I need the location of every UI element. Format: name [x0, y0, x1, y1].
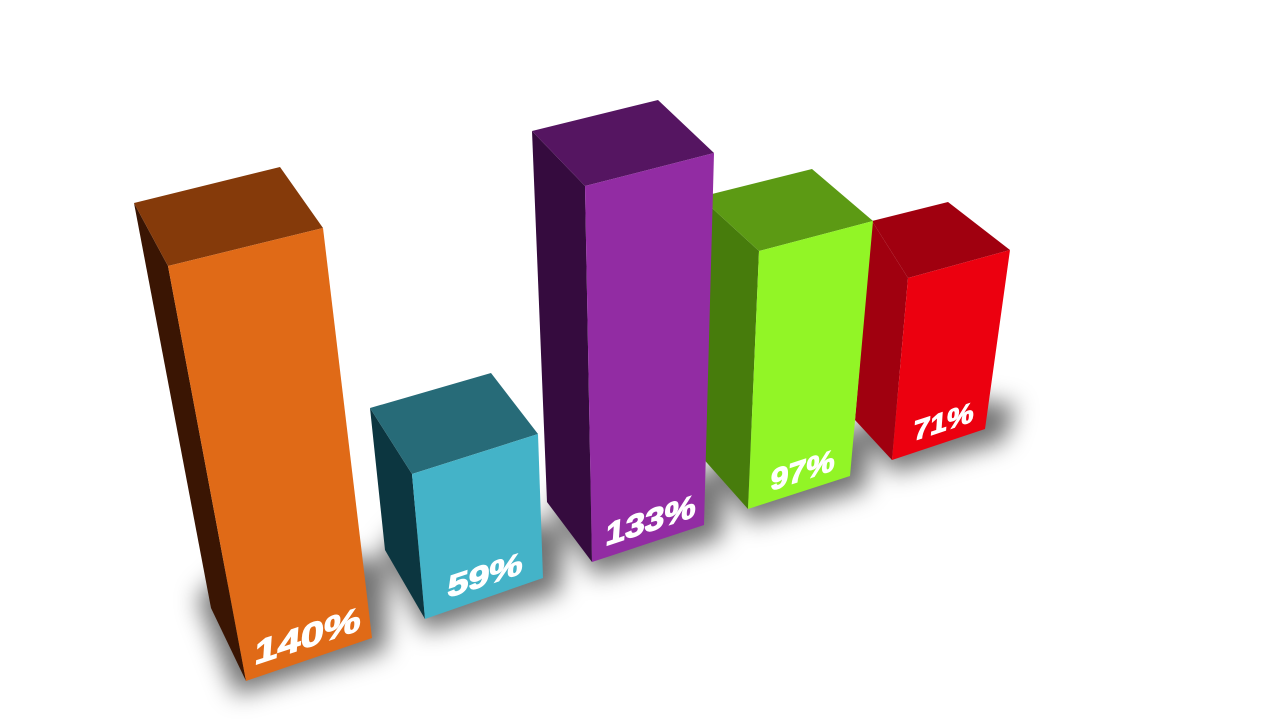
bar: purple 133%: [532, 100, 714, 562]
bar: teal 59%: [370, 373, 543, 619]
label: 59%: 59%: [447, 545, 524, 605]
label: 140%: 140%: [253, 600, 362, 673]
bar: green 97%: [700, 169, 873, 509]
label: 71%: 71%: [913, 397, 975, 448]
bar: orange 140%: [134, 167, 372, 681]
bar: red 71%: [855, 202, 1010, 460]
label: 133%: 133%: [605, 487, 697, 553]
floor shadows: [197, 390, 1016, 695]
label: 97%: 97%: [770, 443, 836, 498]
